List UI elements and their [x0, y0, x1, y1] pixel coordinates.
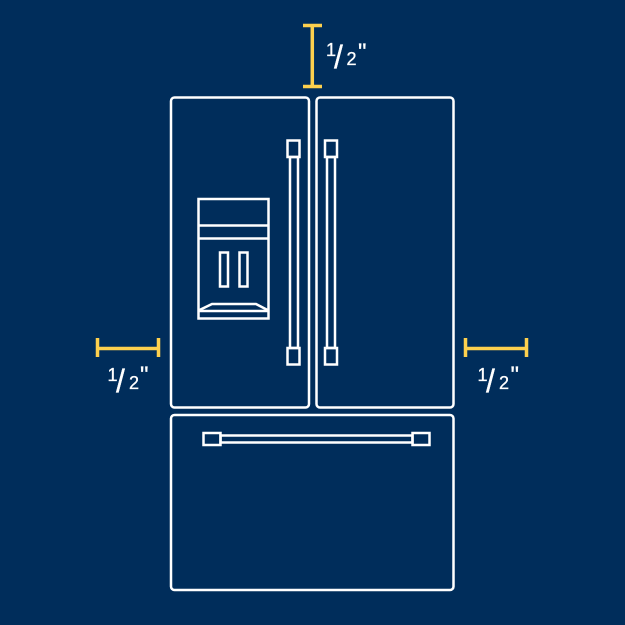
top label: one half inch [326, 39, 367, 75]
right clearance bracket [466, 338, 526, 357]
left door [171, 98, 309, 408]
drawer handle [204, 433, 430, 445]
left door handle [288, 140, 300, 364]
left label: one half inch: " [140, 362, 149, 389]
left label: one half inch [108, 362, 149, 399]
left label: one half inch: / [116, 363, 125, 399]
freezer drawer [171, 415, 454, 590]
top clearance bracket [303, 26, 322, 86]
top label: one half inch: " [358, 39, 367, 66]
left label: one half inch: 2 [129, 373, 139, 393]
left clearance bracket [98, 338, 158, 357]
top label: one half inch: 1 [326, 40, 336, 60]
right door [316, 98, 454, 408]
right label: one half inch [478, 362, 519, 399]
right label: one half inch: 2 [499, 373, 509, 393]
top label: one half inch: / [334, 39, 343, 75]
right label: one half inch: / [486, 363, 495, 399]
top label: one half inch: 2 [346, 49, 357, 69]
right label: one half inch: 1 [478, 365, 488, 385]
refrigerator [171, 98, 454, 590]
left label: one half inch: 1 [108, 365, 118, 385]
right door handle [325, 140, 337, 364]
water and ice dispenser [198, 199, 268, 318]
right label: one half inch: " [510, 362, 519, 389]
